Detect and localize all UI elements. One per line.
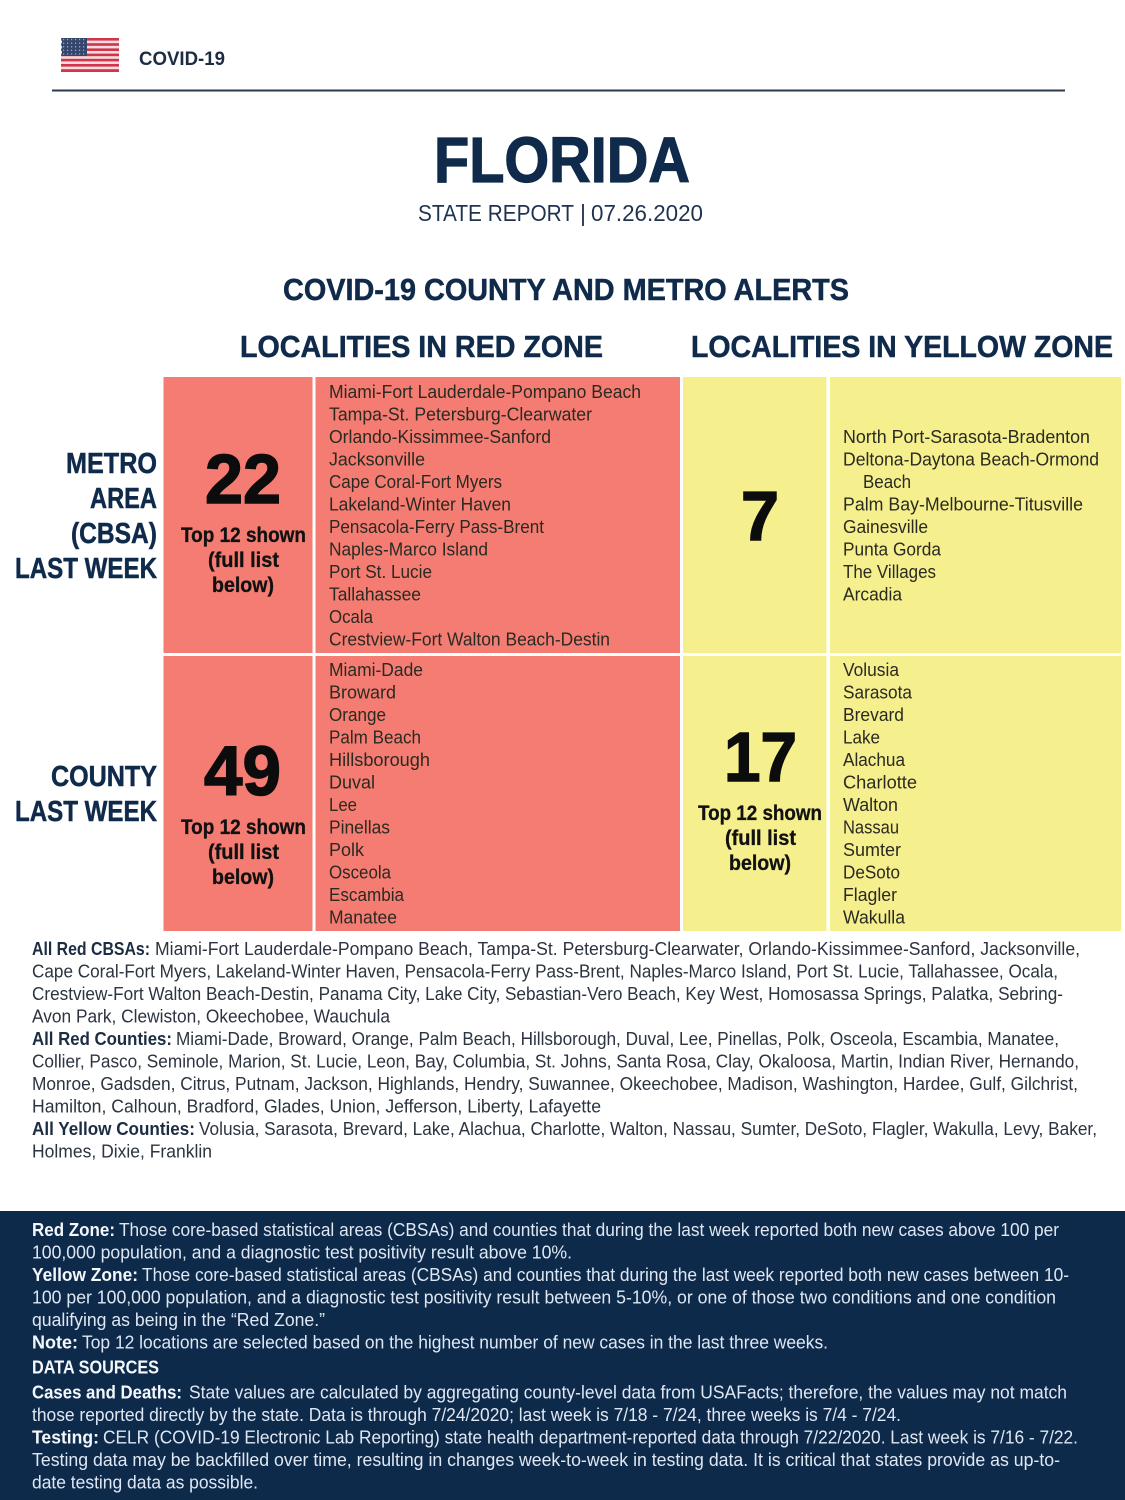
- header: [52, 38, 1065, 92]
- panel: red metro list: Cape Coral-Fort Myers: [329, 472, 502, 492]
- panel: red county count: (full list: [208, 841, 279, 864]
- icon: US flag: [61, 38, 119, 72]
- panel: red county count: 49: [204, 732, 281, 810]
- panel: red metro list: Port St. Lucie: [329, 562, 432, 582]
- row label: metro area: [15, 448, 157, 585]
- panel: red metro list: Orlando-Kissimmee-Sanford: [329, 427, 551, 447]
- panel: yellow county list: Nassau: [843, 818, 899, 838]
- panel: red county count: [164, 656, 312, 931]
- panel: red metro count: [164, 377, 312, 653]
- panel: red metro list: Pensacola-Ferry Pass-Brent: [329, 517, 544, 537]
- text: red zone definition: 100,000 population, and a diagnostic test positivity result above 10%.: [32, 1242, 572, 1262]
- text: all yellow counties: Volusia, Sarasota, Brevard, Lake, Alachua, Charlotte, Walton, Nassau, Sumter, DeSoto, Flagler, Wakulla, Levy, Baker,: [199, 1119, 1097, 1139]
- text block: full locality lists: [32, 939, 1097, 1162]
- panel: yellow metro list: Deltona-Daytona Beach-Ormond: [843, 450, 1099, 470]
- panel: red county list: Orange: [329, 705, 386, 725]
- text: testing: [32, 1428, 1078, 1492]
- text: all red counties: [32, 1029, 1079, 1116]
- panel: yellow county list: DeSoto: [843, 862, 900, 882]
- row label: county: LAST WEEK: [15, 796, 157, 828]
- panel: red metro count: (full list: [208, 549, 279, 572]
- panel: red metro list: Tallahassee: [329, 584, 421, 604]
- panel: yellow county count: (full list: [725, 827, 796, 850]
- text: all red CBSAs: Avon Park, Clewiston, Okeechobee, Wauchula: [32, 1006, 391, 1026]
- text: note: Note:: [32, 1332, 78, 1352]
- panel: red metro count: Top 12 shown: [181, 524, 306, 547]
- panel: red metro list: [316, 377, 680, 653]
- text: note: Top 12 locations are selected based on the highest number of new cases in the last three weeks.: [82, 1332, 828, 1352]
- panel: yellow county list: Alachua: [843, 750, 906, 770]
- row label: county: [15, 761, 157, 828]
- text: yellow zone definition: Those core-based statistical areas (CBSAs) and counties that during the last week reported both new cases between 10-: [142, 1265, 1069, 1285]
- panel: yellow metro list: Gainesville: [843, 517, 928, 537]
- panel: yellow county count: [683, 656, 826, 931]
- row label: metro area: AREA: [90, 483, 157, 515]
- text: all red counties: Miami-Dade, Broward, Orange, Palm Beach, Hillsborough, Duval, Lee, Pinellas, Polk, Osceola, Escambia, Manatee,: [176, 1029, 1059, 1049]
- panel: yellow county list: [830, 656, 1121, 931]
- text: red zone definition: Those core-based statistical areas (CBSAs) and counties that during the last week reported both new cases above 100 per: [119, 1220, 1059, 1240]
- panel: yellow county list: Sumter: [843, 840, 901, 860]
- panel: definitions and data sources: [0, 1211, 1125, 1500]
- panel: red county count: below): [212, 866, 274, 889]
- text: testing: Testing:: [32, 1428, 99, 1448]
- text: yellow zone definition: 100 per 100,000 population, and a diagnostic test positivity result between 5-10%, or one of those two conditions and one condition: [32, 1288, 1056, 1308]
- panel: yellow metro list: Punta Gorda: [843, 540, 942, 560]
- text: testing: Testing data may be backfilled over time, resulting in changes week-to-week in testing data. It is critical that states provide as up-to-: [32, 1450, 1060, 1470]
- text: all red CBSAs: [32, 939, 1080, 1026]
- panel: red metro list: Naples-Marco Island: [329, 540, 488, 560]
- panel: yellow county count: 17: [724, 718, 797, 796]
- text: all red CBSAs: Cape Coral-Fort Myers, Lakeland-Winter Haven, Pensacola-Ferry Pass-Brent, Naples-Marco Island, Port St. Lucie, Tallahassee, Ocala,: [32, 962, 1058, 982]
- panel: red metro list: Lakeland-Winter Haven: [329, 494, 511, 514]
- row label: county: COUNTY: [51, 761, 157, 793]
- panel: red county list: Miami-Dade: [329, 660, 423, 680]
- text: all red counties: All Red Counties:: [32, 1029, 172, 1049]
- panel: yellow county list: Brevard: [843, 705, 904, 725]
- panel: yellow metro list: North Port-Sarasota-Bradenton: [843, 427, 1090, 447]
- text: cases and deaths: Cases and Deaths:: [32, 1382, 182, 1402]
- text: all yellow counties: Holmes, Dixie, Franklin: [32, 1142, 212, 1162]
- text: cases and deaths: [32, 1382, 1067, 1425]
- text: all red CBSAs: All Red CBSAs:: [32, 939, 150, 959]
- panel: red metro list: Jacksonville: [329, 450, 425, 470]
- text: all red counties: Monroe, Gadsden, Citrus, Putnam, Jackson, Highlands, Hendry, Suwannee, Okeechobee, Madison, Washington, Hardee, Gulf, Gilchrist,: [32, 1074, 1078, 1094]
- panel: yellow metro count: [683, 377, 826, 653]
- subtitle: [418, 200, 703, 226]
- text: all red CBSAs: Crestview-Fort Walton Beach-Destin, Panama City, Lake City, Sebastian-Vero Beach, Key West, Homosassa Springs, Palatka, Sebring-: [32, 984, 1063, 1004]
- panel: yellow county list: Walton: [843, 795, 898, 815]
- panel: yellow metro list: The Villages: [843, 562, 936, 582]
- panel: red county list: Duval: [329, 772, 375, 792]
- text: red zone definition: [32, 1220, 1059, 1262]
- panel: yellow county list: Wakulla: [843, 908, 906, 928]
- panel: yellow county list: Sarasota: [843, 682, 913, 702]
- panel: yellow county list: Lake: [843, 728, 880, 748]
- panel: red county list: Osceola: [329, 862, 392, 882]
- panel: red metro list: Tampa-St. Petersburg-Clearwater: [329, 404, 592, 424]
- subtitle: STATE REPORT: [418, 200, 574, 226]
- text: testing: CELR (COVID-19 Electronic Lab Reporting) state health department-reported data through 7/22/2020. Last week is 7/16 - 7/22.: [103, 1428, 1078, 1448]
- text: all yellow counties: [32, 1119, 1097, 1162]
- text: cases and deaths: State values are calculated by aggregating county-level data from USAFacts; therefore, the values may not match: [189, 1382, 1067, 1402]
- panel: yellow metro list: Palm Bay-Melbourne-Titusville: [843, 494, 1083, 514]
- row label: metro area: METRO: [66, 448, 157, 480]
- panel: red county list: Palm Beach: [329, 728, 421, 748]
- panel: yellow county list: Charlotte: [843, 772, 917, 792]
- text: all red CBSAs: Miami-Fort Lauderdale-Pompano Beach, Tampa-St. Petersburg-Clearwater, Orlando-Kissimmee-Sanford, Jacksonville,: [155, 939, 1080, 959]
- column heading: red zone: LOCALITIES IN RED ZONE: [240, 329, 603, 364]
- subtitle: |: [580, 200, 586, 226]
- text: cases and deaths: those reported directly by the state. Data is through 7/24/2020; last week is 7/18 - 7/24, three weeks is 7/4 - 7/24.: [32, 1405, 901, 1425]
- panel: yellow metro count: 7: [741, 477, 779, 555]
- text: all red counties: Hamilton, Calhoun, Bradford, Glades, Union, Jefferson, Liberty, Lafayette: [32, 1096, 601, 1116]
- panel: red county list: Pinellas: [329, 818, 390, 838]
- section heading: COVID-19 COUNTY AND METRO ALERTS: [283, 272, 849, 307]
- panel: red metro list: Crestview-Fort Walton Beach-Destin: [329, 630, 610, 650]
- panel: red metro count: below): [212, 574, 274, 597]
- panel: red metro count: 22: [205, 440, 281, 518]
- panel: yellow county list: Flagler: [843, 885, 897, 905]
- subtitle: 07.26.2020: [591, 200, 703, 226]
- label: COVID-19: COVID-19: [139, 49, 225, 70]
- text: all red counties: Collier, Pasco, Seminole, Marion, St. Lucie, Leon, Bay, Columbia, St. Johns, Santa Rosa, Clay, Okaloosa, Martin, Indian River, Hernando,: [32, 1052, 1079, 1072]
- title: FLORIDA: [434, 124, 690, 196]
- text: yellow zone definition: Yellow Zone:: [32, 1265, 138, 1285]
- text: all yellow counties: All Yellow Counties:: [32, 1119, 195, 1139]
- panel: yellow metro list: [830, 377, 1121, 653]
- panel: red county list: Lee: [329, 795, 357, 815]
- panel: red metro list: Miami-Fort Lauderdale-Pompano Beach: [329, 382, 641, 402]
- panel: red county list: Polk: [329, 840, 365, 860]
- panel: red county list: Broward: [329, 682, 396, 702]
- panel: yellow metro list: Beach: [863, 472, 911, 492]
- panel: red county list: Escambia: [329, 885, 405, 905]
- row label: metro area: LAST WEEK: [15, 553, 157, 585]
- text: testing: date testing data as possible.: [32, 1472, 258, 1492]
- text: red zone definition: Red Zone:: [32, 1220, 115, 1240]
- panel: yellow county count: Top 12 shown: [698, 802, 822, 825]
- panel: red county list: [316, 656, 680, 931]
- panel: red county list: Hillsborough: [329, 750, 430, 770]
- panel: red county list: Manatee: [329, 908, 397, 928]
- panel: yellow county list: Volusia: [843, 660, 900, 680]
- text: yellow zone definition: qualifying as being in the “Red Zone.”: [32, 1310, 325, 1330]
- text: yellow zone definition: [32, 1265, 1069, 1330]
- panel: red county count: Top 12 shown: [181, 816, 306, 839]
- header rule: [52, 90, 1065, 92]
- panel: yellow county count: below): [729, 852, 791, 875]
- panel: red metro list: Ocala: [329, 607, 374, 627]
- row label: metro area: (CBSA): [71, 518, 157, 550]
- heading: data sources: DATA SOURCES: [32, 1358, 159, 1378]
- panel: yellow metro list: Arcadia: [843, 584, 903, 604]
